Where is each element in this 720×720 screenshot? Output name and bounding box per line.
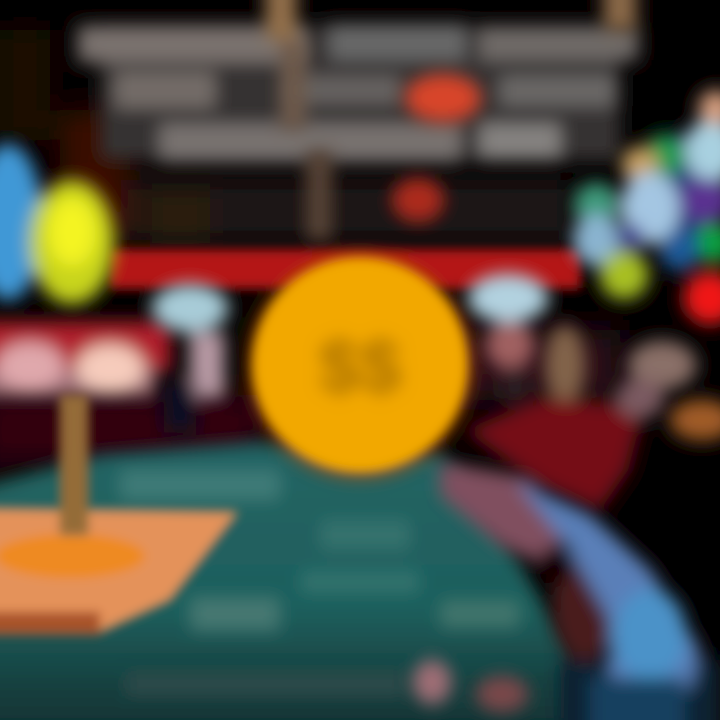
wooden posts: [266, 0, 636, 240]
red banner: [110, 250, 580, 288]
roulette wheel: [0, 508, 238, 634]
chips: [413, 660, 528, 712]
sign board with blurred headline rows: [78, 24, 638, 162]
light blue caps and croupiers: [152, 274, 548, 432]
seated people in red: [465, 325, 720, 510]
table markings: [120, 470, 520, 696]
dark red back wall: [0, 30, 620, 465]
central gold coin: [246, 251, 474, 479]
coin label: $$: [319, 325, 401, 408]
wheel post: [60, 395, 88, 535]
green roulette table: [0, 442, 580, 720]
red lights: [392, 74, 481, 222]
pink table edge and blue sleeve: [440, 462, 720, 720]
left blue and yellow lights: [0, 144, 114, 304]
left red and white awning: [0, 322, 170, 396]
right colourful balloon cluster: [573, 91, 720, 324]
